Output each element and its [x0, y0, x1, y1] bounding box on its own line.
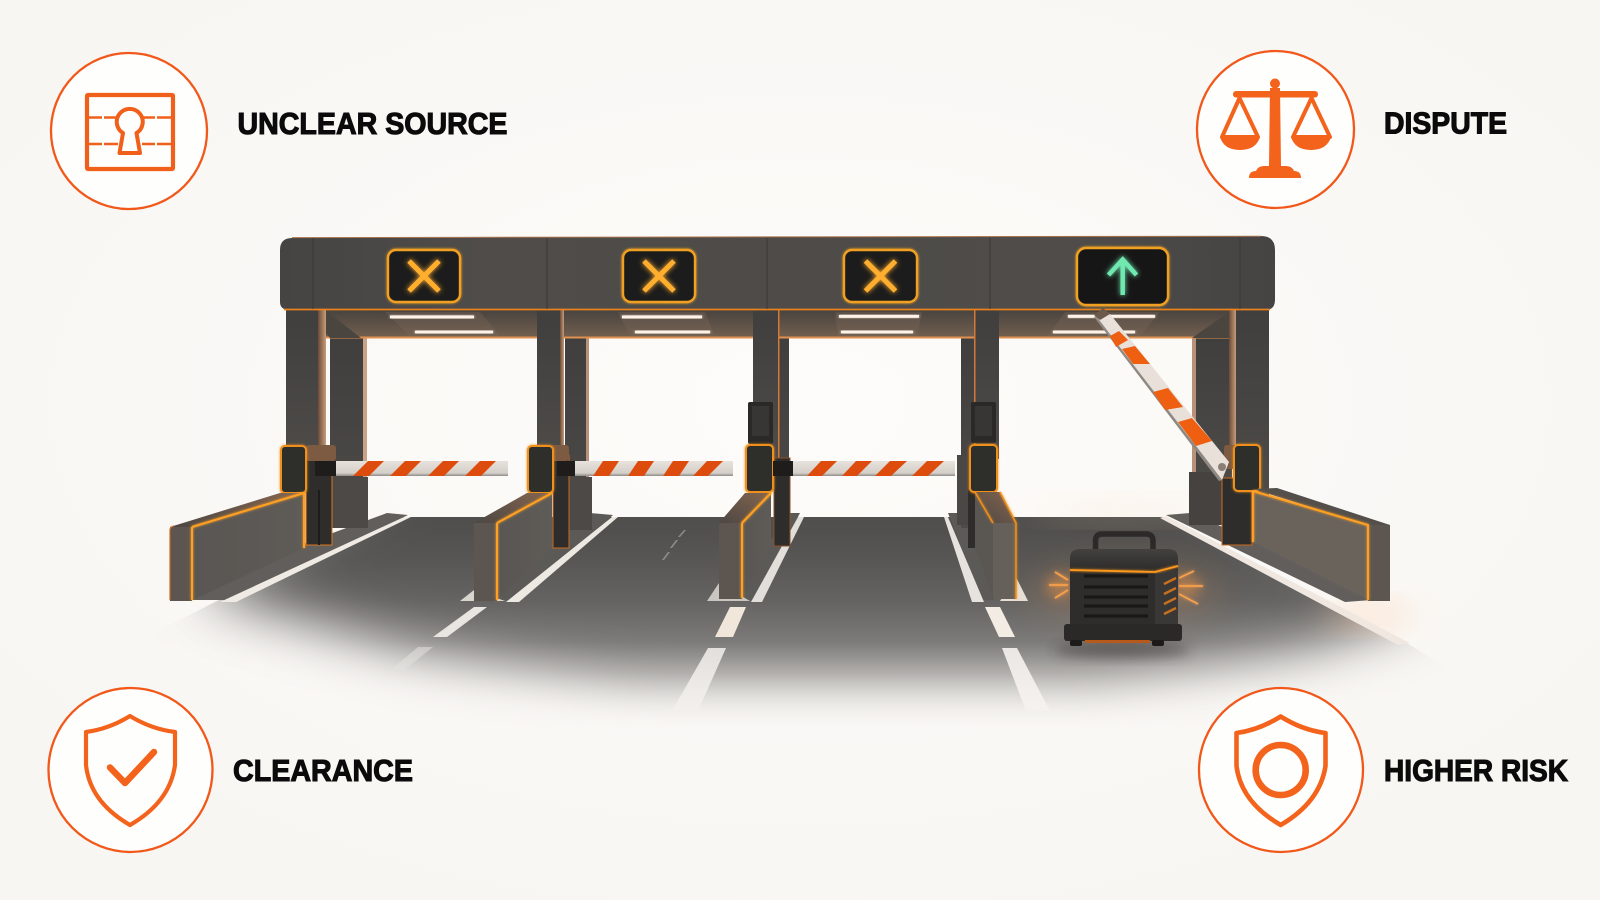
label: dispute: DISPUTE [1384, 106, 1507, 140]
front pillars [286, 309, 1269, 499]
gate housing 1 [281, 445, 368, 545]
gate housing 5 [1189, 445, 1260, 545]
sign: lane 3 closed [844, 250, 917, 302]
gate housing 2 [528, 445, 592, 548]
sign: lane 4 open with green arrow [1077, 248, 1168, 305]
label: clearance: CLEARANCE [233, 753, 413, 788]
icon: clearance shield check [48, 688, 212, 852]
lane divider rails and white lines [190, 513, 1410, 645]
icon: dispute scales [1197, 51, 1354, 208]
closed barrier arm 3 [773, 461, 955, 476]
warm floor glow [1030, 500, 1415, 627]
lane markings [391, 530, 1050, 711]
barrier wall 1 [170, 493, 304, 601]
sign: lane 1 closed [388, 250, 460, 302]
closed barrier arm 1 [315, 461, 508, 476]
barrier wall 5 [1253, 488, 1390, 601]
label: higher risk: HIGHER RISK [1384, 753, 1569, 788]
barrier wall 3 [719, 493, 771, 599]
label: unclear source: UNCLEAR SOURCE [238, 106, 508, 141]
back pillars [330, 338, 1232, 530]
icon: unclear source keyhole [51, 53, 207, 209]
gate housing 4 with kiosk [957, 402, 997, 548]
icon: higher risk shield [1199, 688, 1363, 852]
raised barrier arm [1094, 308, 1229, 481]
gate housing 3 with kiosk [746, 402, 790, 546]
abandoned case with warning glow [1046, 534, 1203, 658]
sign: lane 2 closed [623, 250, 695, 302]
road surface [188, 517, 1420, 712]
canopy soffit with lights [318, 309, 1238, 338]
barrier wall 4 [975, 492, 1016, 599]
overhead canopy [280, 236, 1275, 310]
barrier wall 2 [474, 493, 552, 601]
closed barrier arm 2 [557, 461, 733, 476]
